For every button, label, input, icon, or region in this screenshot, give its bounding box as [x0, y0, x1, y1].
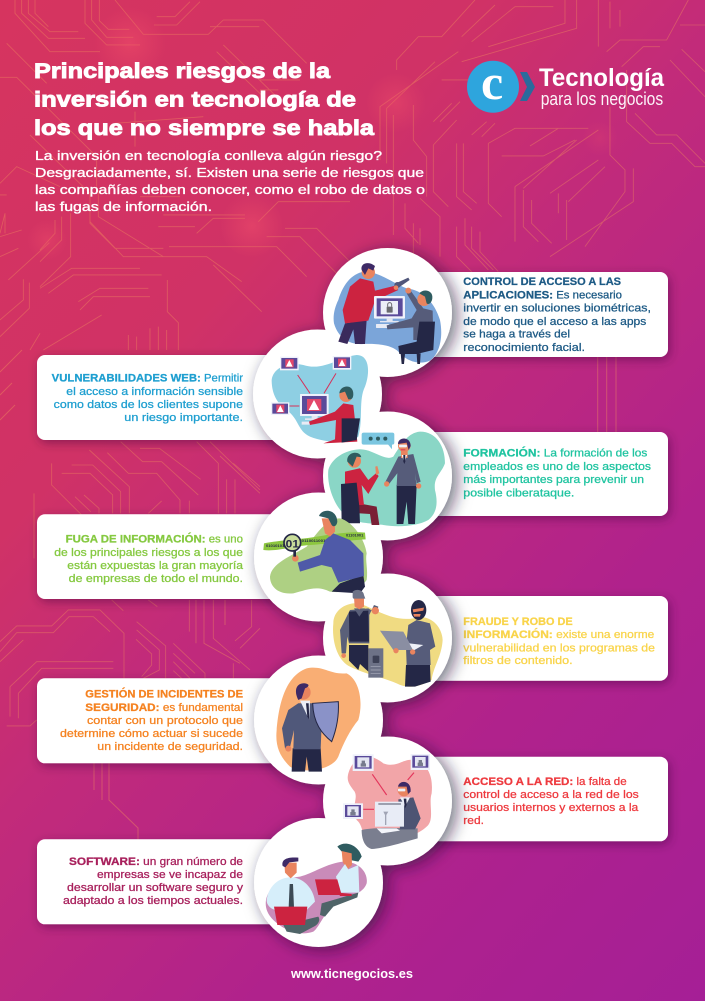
illustration: training	[328, 432, 445, 526]
card text: gestión de incidentes: GESTIÓN DE INCIDENTES DE	[85, 688, 244, 701]
card: gestión de incidentes de seguridad	[37, 678, 300, 763]
logo: Tecnología para los negocios: Tecnología	[539, 64, 665, 92]
card text: formación: FORMACIÓN: La formación de los	[463, 447, 648, 460]
card text: fuga de información: están expuestas la gran mayoría	[67, 560, 244, 572]
card text: fuga de información	[54, 533, 244, 585]
illustration: network access	[343, 754, 432, 849]
card text: gestión de incidentes: un incidente de seguridad.	[97, 741, 243, 753]
card text: vulnerabilidades web: un riesgo importante.	[124, 412, 243, 424]
card text: vulnerabilidades web: como datos de los clientes supone	[54, 399, 243, 411]
illustration: information leak: 01010101	[266, 544, 284, 548]
illustration: information leak	[263, 511, 367, 594]
illustration: access control	[334, 263, 441, 364]
card text: fraude y robo: FRAUDE Y ROBO DE	[463, 616, 573, 628]
card text: fuga de información: FUGA DE INFORMACIÓN: es uno	[66, 533, 243, 546]
card text: software: adaptado a los tiempos actuales.	[63, 895, 243, 907]
card text: gestión de incidentes: determine cómo actuar si sucede	[60, 728, 243, 740]
card: vulnerabilidades web	[37, 355, 300, 440]
card: formación	[400, 432, 668, 516]
logo: Tecnología para los negocios: para los negocios	[541, 88, 663, 109]
card text: control de acceso: CONTROL DE ACCESO A LAS	[463, 276, 622, 288]
card text: control de acceso: invertir en soluciones biométricas,	[463, 303, 651, 315]
card text: vulnerabilidades web: VULNERABILIDADES WEB: Permitir	[52, 373, 243, 385]
card text: fraude y robo: filtros de contenido.	[463, 655, 573, 667]
card text: acceso a la red: control de acceso a la red de los	[463, 789, 639, 801]
card text: formación	[463, 447, 651, 500]
card text: vulnerabilidades web: el acceso a información sensible	[66, 386, 243, 398]
card: fraude y robo de información	[400, 596, 668, 681]
illustration: information leak: 01100110011	[302, 539, 328, 543]
card text: vulnerabilidades web	[52, 373, 243, 424]
card text: control de acceso: APLICACIONES: Es necesario	[463, 290, 622, 302]
card text: software: desarrollar un software seguro y	[67, 882, 243, 894]
title: inversión en tecnología de	[34, 88, 356, 112]
card text: gestión de incidentes: contar con un protocolo que	[87, 715, 243, 727]
title: Principales riesgos de la	[34, 59, 331, 83]
white circles chain	[253, 248, 452, 947]
card text: gestión de incidentes: SEGURIDAD: es fundamental	[85, 702, 243, 714]
logo: Tecnología para los negocios	[467, 54, 665, 113]
card: acceso a la red	[400, 757, 668, 841]
intro text: las compañías deben conocer, como el robo de datos o	[35, 182, 425, 197]
card text: fraude y robo: vulnerabilidad en los programas de	[463, 642, 655, 654]
card text: fuga de información: de los principales riesgos a los que	[54, 547, 243, 559]
logo: Tecnología para los negocios: c	[481, 54, 503, 110]
intro text: las fugas de información.	[35, 199, 212, 214]
card text: control de acceso: de modo que el acceso a las apps	[463, 316, 647, 328]
card text: fraude y robo	[463, 616, 655, 667]
card text: control de acceso: se haga a través del	[463, 329, 570, 341]
card text: formación: empleados es uno de los aspectos	[463, 461, 651, 473]
illustration: security incident management	[276, 668, 361, 772]
card text: acceso a la red: red.	[463, 815, 484, 827]
background glows	[27, 7, 618, 260]
illustration: software	[266, 844, 367, 934]
intro text: La inversión en tecnología conlleva algún riesgo?	[35, 148, 382, 163]
intro text: Desgraciadamente, sí. Existen una serie de riesgos que	[35, 165, 424, 180]
card text: acceso a la red: ACCESO A LA RED: la falta de	[463, 776, 627, 788]
card text: software: empresas se ve incapaz de	[97, 869, 243, 881]
card text: acceso a la red	[463, 776, 639, 827]
card text: software: SOFTWARE: un gran número de	[69, 856, 243, 868]
card text: gestión de incidentes	[60, 688, 244, 753]
card text: fuga de información: de empresas de todo el mundo.	[69, 573, 243, 585]
intro text	[35, 148, 425, 214]
footer url: www.ticnegocios.es	[290, 967, 413, 981]
card: fuga de información	[37, 514, 300, 599]
card: software	[37, 839, 300, 924]
card text: formación: posible ciberataque.	[463, 488, 574, 500]
card: control de acceso a las aplicaciones	[400, 272, 668, 357]
illustration: fraud and theft	[333, 590, 443, 687]
card text: acceso a la red: usuarios internos y externos a la	[463, 802, 639, 814]
illustration: information leak: 01101001	[346, 534, 363, 538]
card text: software	[63, 856, 243, 907]
illustration: web vulnerabilities	[271, 355, 368, 443]
card text: control de acceso: reconocimiento facial.	[463, 342, 585, 354]
card text: formación: más importantes para prevenir un	[463, 474, 644, 486]
illustration: information leak: 01	[286, 538, 299, 550]
card text: control de acceso	[463, 276, 651, 354]
card text: fraude y robo: INFORMACIÓN: existe una enorme	[463, 628, 654, 641]
title: los que no siempre se habla	[34, 116, 375, 140]
title	[34, 59, 375, 140]
